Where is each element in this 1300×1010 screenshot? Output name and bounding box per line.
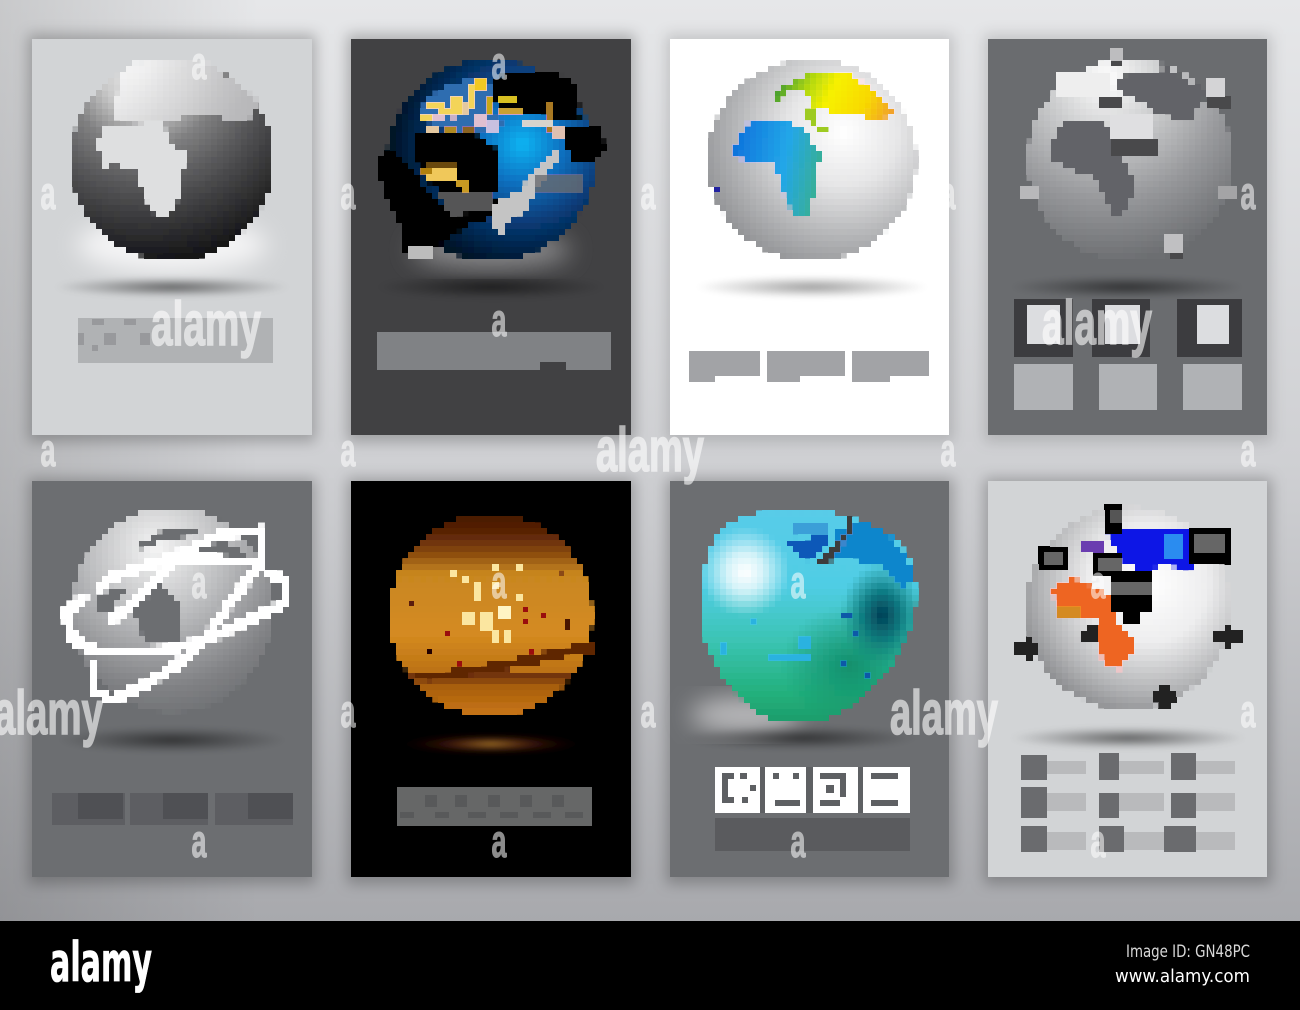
watermark text: a — [492, 37, 507, 89]
watermark text: a — [1240, 685, 1256, 737]
icon and text grid — [1021, 753, 1235, 852]
image id: Image ID: GN48PC — [1126, 942, 1250, 962]
panel background — [988, 39, 1267, 435]
panel: globe with white orbits — [32, 481, 312, 877]
panel background — [988, 481, 1267, 877]
icon: apple — [700, 510, 924, 725]
planet reflection — [399, 734, 583, 754]
panel: teal apple — [670, 481, 949, 877]
globe glow — [411, 232, 571, 268]
panel background — [351, 39, 631, 435]
globe shadow — [54, 277, 290, 297]
apple shadow — [682, 726, 918, 750]
contact icons strip — [715, 767, 910, 813]
watermark text: a — [1090, 556, 1106, 608]
panel: night-earth blue globe — [351, 39, 631, 435]
website: www.alamy.com — [1115, 966, 1250, 987]
watermark text: a — [192, 556, 207, 608]
watermark text: a — [1240, 167, 1256, 219]
icon: globe with orbit rings — [66, 508, 286, 712]
icon: globe with Africa — [71, 58, 273, 260]
text block placeholder — [78, 318, 273, 363]
watermark text: alamy — [890, 679, 998, 748]
watermark text: a — [640, 167, 656, 219]
globe shadow — [1010, 727, 1246, 749]
icon: silver globe — [708, 60, 916, 260]
watermark text: a — [492, 815, 507, 867]
panel: globe with colored map and pins — [988, 481, 1267, 877]
watermark text: alamy — [151, 290, 261, 359]
watermark text: a — [640, 685, 656, 737]
watermark text: a — [340, 167, 356, 219]
text block placeholders — [689, 351, 929, 382]
icon: silver globe with pins — [1015, 507, 1241, 709]
watermark text: a — [340, 424, 356, 476]
watermark text: alamy — [596, 416, 704, 485]
watermark text: a — [192, 815, 207, 867]
icon tiles — [1014, 299, 1242, 357]
watermark text: a — [492, 556, 507, 608]
globe shadow — [694, 276, 930, 298]
text block placeholders — [52, 793, 293, 825]
panel: orange planet — [351, 481, 631, 877]
watermark text: a — [192, 37, 207, 89]
text block placeholder — [715, 818, 910, 851]
apple glow — [690, 697, 800, 733]
panel: grey globe with pins — [988, 39, 1267, 435]
panel: grey globe — [32, 39, 312, 435]
panel background — [32, 481, 312, 877]
globe shadow — [376, 275, 606, 299]
watermark text: a — [940, 167, 956, 219]
watermark text: a — [340, 685, 356, 737]
watermark text: a — [1240, 424, 1256, 476]
text block placeholder — [377, 332, 611, 370]
text block placeholder — [397, 787, 592, 826]
watermark text: a — [790, 556, 806, 608]
globe glow — [77, 217, 267, 273]
panel background — [32, 39, 312, 435]
panel background — [351, 481, 631, 877]
watermark text: a — [40, 167, 56, 219]
footer logo: alamy — [50, 931, 152, 994]
watermark text: a — [1090, 815, 1106, 867]
globe shadow — [57, 727, 287, 753]
footer band — [0, 921, 1300, 1010]
globe shadow — [1009, 276, 1245, 298]
icon: globe with map pins — [1022, 46, 1234, 261]
watermark text: a — [790, 815, 806, 867]
watermark text: a — [492, 294, 507, 346]
panel: silver globe with coloured continents — [670, 39, 949, 435]
watermark text: a — [940, 424, 956, 476]
icon: blue globe with city lights — [377, 60, 605, 260]
panel background — [670, 481, 949, 877]
icon: orange planet — [390, 514, 592, 716]
watermark text — [0, 37, 1256, 867]
watermark text: a — [40, 424, 56, 476]
panel background — [670, 39, 949, 435]
text placeholders — [1014, 364, 1242, 410]
watermark text: alamy — [1042, 289, 1152, 358]
